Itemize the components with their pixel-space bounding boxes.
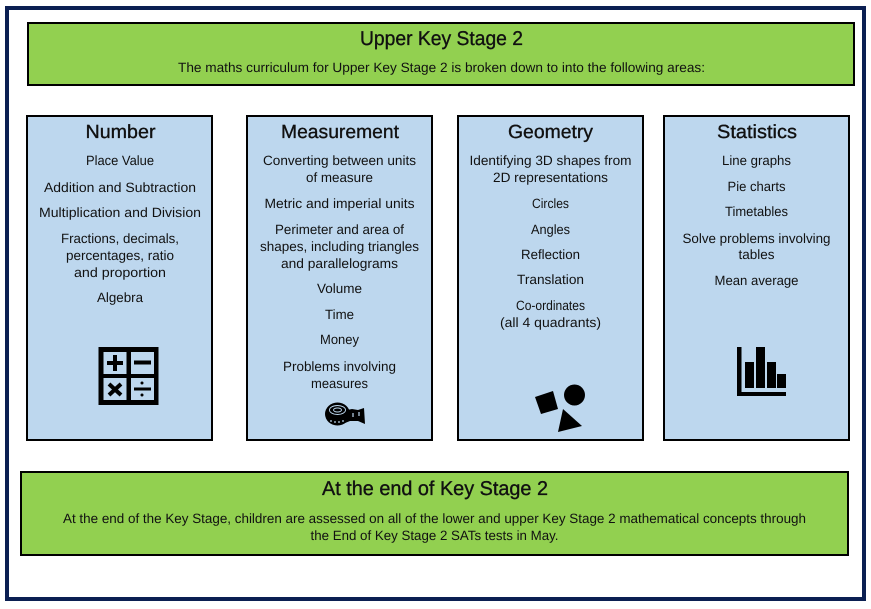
list: statistics topics: tables (738, 247, 775, 262)
list: measurement topics (260, 153, 419, 391)
heading: end of key stage: At the end of Key Stage 2 (322, 478, 548, 500)
heading: measurement: Measurement (281, 122, 400, 143)
list: geometry topics: Co-ordinates (516, 298, 585, 313)
list: number topics: Place Value (86, 153, 154, 168)
panel: measurement (247, 116, 432, 440)
list: measurement topics: Metric and imperial units (264, 196, 415, 211)
panel: header banner (28, 23, 854, 85)
list: measurement topics: and parallelograms (281, 256, 398, 271)
list: measurement topics: Perimeter and area of (275, 222, 404, 237)
heading: geometry: Geometry (508, 122, 594, 143)
icon: tape measure (325, 402, 365, 426)
list: measurement topics: Money (320, 332, 359, 347)
list: measurement topics: Volume (317, 281, 362, 296)
heading: number: Number (86, 122, 156, 143)
list: geometry topics: 2D representations (493, 170, 608, 185)
text: assessment summary: At the end of the Key Stage, children are assessed on all of the lower and upper Key Stage 2 mathematical concepts through (63, 511, 806, 526)
list: statistics topics: Solve problems involving (682, 231, 830, 246)
panel: geometry (458, 116, 643, 440)
list: statistics topics (682, 153, 830, 288)
list: geometry topics: Identifying 3D shapes from (470, 153, 632, 168)
list: number topics: Fractions, decimals, (61, 231, 179, 246)
list: measurement topics: Problems involving (283, 359, 396, 374)
panel: number (27, 116, 212, 440)
list: number topics: Algebra (97, 290, 143, 305)
list: geometry topics: Reflection (521, 247, 580, 262)
list: geometry topics: Circles (532, 196, 569, 211)
list: geometry topics: (all 4 quadrants) (500, 315, 601, 330)
icon: bar chart (737, 347, 786, 396)
list: measurement topics: of measure (306, 170, 373, 185)
list: statistics topics: Mean average (714, 273, 798, 288)
list: statistics topics: Timetables (725, 204, 788, 219)
icon: calculator symbols (98, 347, 158, 405)
list: statistics topics: Line graphs (722, 153, 791, 168)
title: Upper Key Stage 2 (360, 28, 523, 50)
text: assessment summary: the End of Key Stage 2 SATs tests in May. (310, 528, 558, 543)
list: measurement topics: Converting between units (263, 153, 416, 168)
list: geometry topics (470, 153, 632, 330)
list: number topics: Multiplication and Division (39, 205, 201, 220)
list: statistics topics: Pie charts (728, 179, 786, 194)
subtitle: The maths curriculum for Upper Key Stage 2 is broken down to into the following areas: (178, 60, 705, 75)
icon: shapes (535, 384, 585, 432)
list: measurement topics: measures (311, 376, 368, 391)
list: number topics: and proportion (74, 265, 166, 280)
list: geometry topics: Angles (531, 222, 570, 237)
text: assessment summary (63, 511, 806, 543)
list: number topics (39, 153, 201, 305)
panel: end of key stage banner (21, 472, 848, 555)
list: measurement topics: shapes, including triangles (260, 239, 419, 254)
list: number topics: percentages, ratio (66, 248, 174, 263)
panel: statistics (664, 116, 849, 440)
heading: statistics: Statistics (717, 122, 797, 143)
list: geometry topics: Translation (517, 272, 584, 287)
list: number topics: Addition and Subtraction (44, 180, 196, 195)
list: measurement topics: Time (325, 307, 354, 322)
